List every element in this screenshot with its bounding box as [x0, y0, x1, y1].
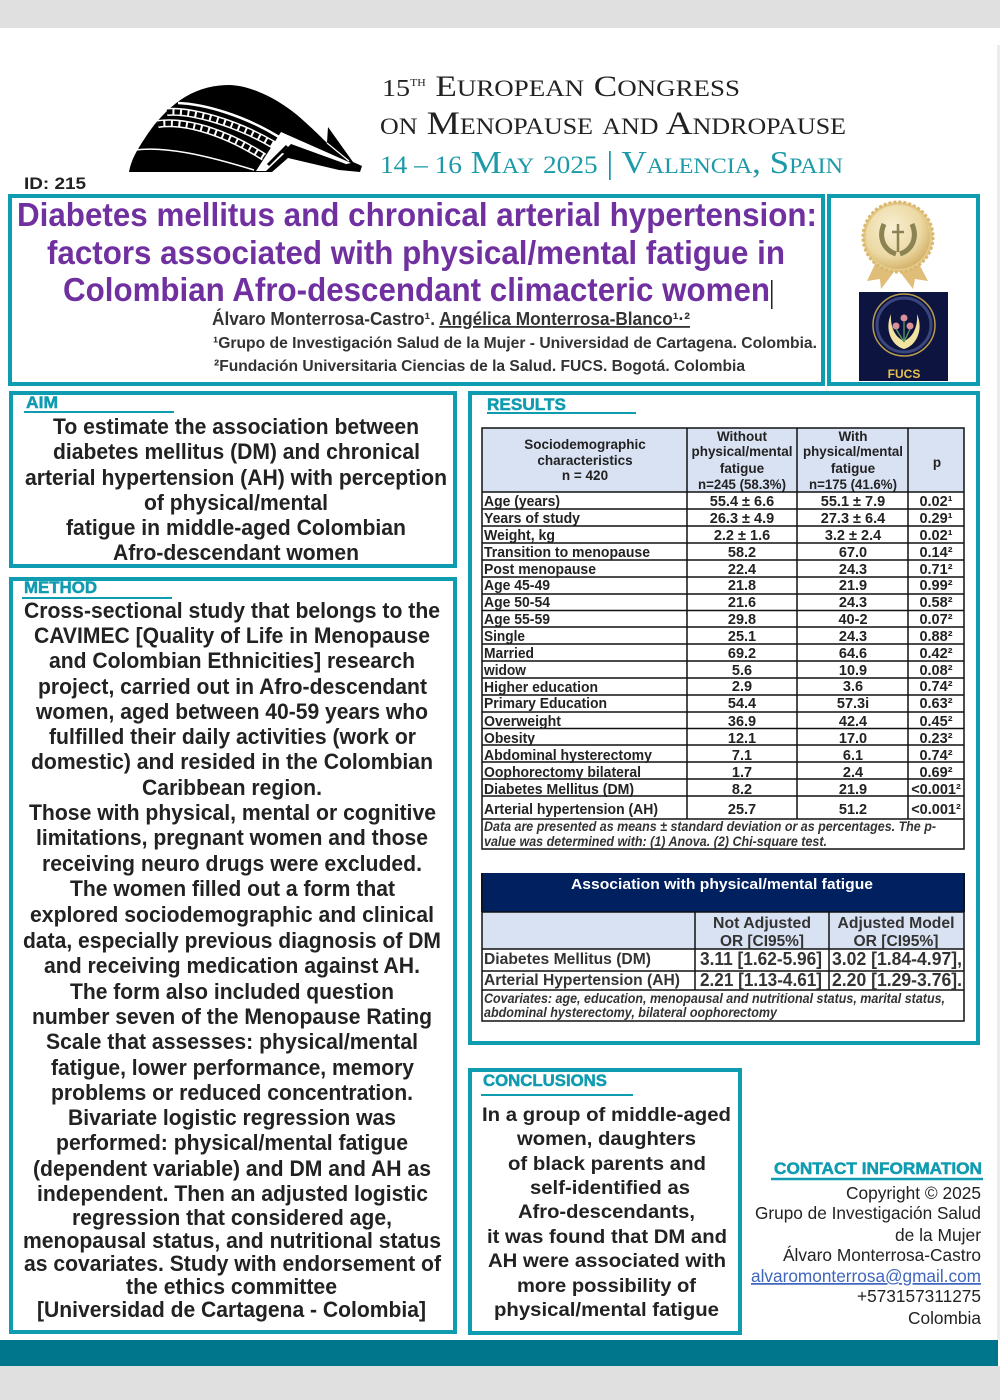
table rows: 21.9 — [839, 782, 867, 798]
table rows: 0.74² — [919, 748, 953, 764]
contact heading: CONTACT INFORMATION — [774, 1159, 982, 1178]
table rows: 21.6 — [728, 595, 756, 611]
congress heading: 14 – 16 May 2025 | Valencia, Spain — [380, 144, 843, 180]
association rows: Diabetes Mellitus (DM) — [484, 951, 651, 968]
panel: conclusions — [470, 1070, 740, 1333]
method text: women, aged between 40-59 years who — [35, 699, 428, 724]
aim heading: AIM — [26, 393, 58, 412]
table rows: 1.7 — [732, 765, 752, 781]
panel: institution logos — [829, 196, 978, 384]
table rows: 6.1 — [843, 748, 863, 764]
table rows: 0.74² — [919, 679, 953, 695]
method text: receiving neuro drugs were excluded. — [42, 851, 422, 876]
table rows: Married — [484, 646, 534, 662]
method text: independent. Then an adjusted logistic — [37, 1181, 428, 1206]
conclusions text: more possibility of — [517, 1276, 697, 1297]
title: factors associated with physical/mental fatigue in — [47, 234, 785, 271]
panel: aim — [11, 393, 455, 566]
association rows: 3.11 [1.62-5.96] — [700, 949, 822, 969]
table rows: 54.4 — [728, 696, 756, 712]
table rows: 0.07² — [919, 612, 953, 628]
method text: as covariates. Study with endorsement of — [24, 1251, 442, 1276]
conclusions text: In a group of middle-aged — [482, 1105, 731, 1126]
table rows: Weight, kg — [484, 528, 555, 544]
association rows — [484, 949, 962, 990]
title: Colombian Afro-descendant climacteric women — [63, 271, 770, 308]
association rows: Arterial Hypertension (AH) — [484, 972, 680, 989]
table rows: 67.0 — [839, 545, 867, 561]
congress heading: European Congress — [435, 68, 722, 104]
contact details: Copyright © 2025 — [846, 1183, 981, 1203]
association column headers: OR [CI95%] — [854, 933, 938, 950]
association column headers: OR [CI95%] — [720, 933, 804, 950]
method text: The form also included question — [70, 979, 394, 1004]
method text: problems or reduced concentration. — [51, 1080, 413, 1105]
contact details — [751, 1183, 981, 1328]
table rows: 58.2 — [728, 545, 756, 561]
congress heading: 15 — [382, 76, 410, 102]
table rows: Abdominal hysterectomy — [484, 748, 652, 764]
table rows: 0.02¹ — [919, 494, 953, 510]
table rows: 24.3 — [839, 562, 867, 578]
table rows: Obesity — [484, 731, 535, 747]
table footnote: Data are presented as means ± standard deviation or as percentages. The p- — [484, 819, 936, 834]
table footnote: value was determined with: (1) Anova. (2) Chi-square test. — [484, 834, 827, 849]
conclusions heading: CONCLUSIONS — [483, 1071, 607, 1090]
authors — [212, 308, 817, 375]
table rows: 64.6 — [839, 646, 867, 662]
contact details: Grupo de Investigación Salud — [755, 1203, 981, 1223]
aim text: fatigue in middle-aged Colombian — [66, 515, 406, 540]
table rows: 0.42² — [919, 646, 953, 662]
conclusions text: it was found that DM and — [487, 1227, 727, 1248]
method text: CAVIMEC [Quality of Life in Menopause — [34, 623, 430, 648]
table rows: 21.8 — [728, 578, 756, 594]
table rows: Age (years) — [484, 494, 560, 510]
panel: results — [470, 393, 978, 1043]
contact details: +573157311275 — [857, 1286, 981, 1306]
table rows: 69.2 — [728, 646, 756, 662]
table header: physical/mental — [692, 444, 792, 459]
conclusions text: self-identified as — [530, 1178, 690, 1199]
authors: ²Fundación Universitaria Ciencias de la Salud. FUCS. Bogotá. Colombia — [214, 358, 745, 375]
contact details: Colombia — [908, 1308, 981, 1328]
table rows: Post menopause — [484, 562, 596, 578]
table rows: 26.3 ± 4.9 — [710, 511, 774, 527]
congress heading — [380, 68, 846, 180]
table header: Sociodemographic — [524, 437, 646, 452]
results heading: RESULTS — [487, 395, 566, 414]
method text: Those with physical, mental or cognitive — [29, 800, 436, 825]
table rows: 36.9 — [728, 714, 756, 730]
bottom grey band — [0, 1366, 1000, 1400]
table rows: Single — [484, 629, 525, 645]
table rows: 2.4 — [843, 765, 863, 781]
poster ID: ID: 215 — [24, 174, 86, 193]
table rows: 0.14² — [919, 545, 953, 561]
table rows: 24.3 — [839, 595, 867, 611]
method text: and Colombian Ethnicities] research — [49, 648, 415, 673]
table rows: 2.9 — [732, 679, 752, 695]
method text: Bivariate logistic regression was — [68, 1105, 396, 1130]
icon: FUCS seal — [859, 292, 948, 381]
icon: FUCS seal: FUCS — [888, 367, 920, 381]
aim text: of physical/mental — [144, 490, 328, 515]
method text: (dependent variable) and DM and AH as — [33, 1156, 431, 1181]
table rows: 51.2 — [839, 802, 867, 818]
congress heading: th — [410, 75, 426, 90]
table header: physical/mental — [803, 444, 903, 459]
table rows: 55.1 ± 7.9 — [821, 494, 885, 510]
table: association with fatigue — [481, 873, 965, 1021]
table header: Without — [717, 429, 768, 444]
table rows: 0.69² — [919, 765, 953, 781]
association footnote: abdominal hysterectomy, bilateral oophorectomy — [484, 1005, 778, 1020]
method text: project, carried out in Afro-descendant — [38, 674, 428, 699]
icon: gold medal — [863, 202, 933, 289]
association column headers: Adjusted Model — [838, 915, 954, 932]
table rows: 0.02¹ — [919, 528, 953, 544]
table rows: 17.0 — [839, 731, 867, 747]
table rows: 0.08² — [919, 663, 953, 679]
conclusions text: Afro-descendants, — [518, 1202, 695, 1223]
association column headers: Not Adjusted — [713, 915, 811, 932]
table rows: 2.2 ± 1.6 — [714, 528, 770, 544]
table header: p — [933, 455, 941, 470]
table rows: 0.45² — [919, 714, 953, 730]
contact information — [751, 1159, 983, 1328]
table rows: widow — [483, 663, 527, 679]
method text: performed: physical/mental fatigue — [56, 1130, 408, 1155]
aim text: arterial hypertension (AH) with perception — [25, 465, 447, 490]
table rows: 21.9 — [839, 578, 867, 594]
congress heading: on Menopause and Andropause — [380, 106, 846, 142]
table header: fatigue — [720, 461, 765, 476]
table rows: 3.6 — [843, 679, 863, 695]
method text: [Universidad de Cartagena - Colombia] — [37, 1297, 426, 1322]
table header: n = 420 — [562, 468, 608, 483]
footer bar — [0, 1340, 998, 1366]
method text: the ethics committee — [126, 1274, 337, 1299]
table rows: 0.58² — [919, 595, 953, 611]
authors: Álvaro Monterrosa-Castro¹. Angélica Monterrosa-Blanco¹·² — [212, 308, 690, 329]
table rows: 24.3 — [839, 629, 867, 645]
table rows: Higher education — [484, 680, 598, 696]
method text: explored sociodemographic and clinical — [30, 902, 434, 927]
method text: limitations, pregnant women and those — [36, 825, 428, 850]
authors: ¹Grupo de Investigación Salud de la Mujer - Universidad de Cartagena. Colombia. — [213, 335, 817, 352]
method text: The women filled out a form that — [70, 876, 396, 901]
conclusions text: AH were associated with — [488, 1251, 726, 1272]
association rows: 3.02 [1.84-4.97], — [832, 949, 962, 969]
table header: fatigue — [831, 461, 876, 476]
table header — [482, 428, 964, 492]
conclusions text: women, daughters — [516, 1129, 696, 1150]
table rows: 5.6 — [732, 663, 752, 679]
table rows: Years of study — [484, 511, 580, 527]
table footnote — [484, 819, 936, 849]
table rows: 3.2 ± 2.4 — [825, 528, 881, 544]
table rows — [483, 494, 961, 818]
method text: domestic) and resided in the Colombian — [31, 749, 433, 774]
method text — [23, 598, 442, 1322]
method text: number seven of the Menopause Rating — [32, 1004, 432, 1029]
table rows: 40-2 — [838, 612, 868, 628]
association heading: Association with physical/mental fatigue — [571, 876, 873, 893]
table rows: Transition to menopause — [484, 545, 650, 561]
table rows: 22.4 — [728, 562, 756, 578]
title — [17, 196, 817, 308]
method text: regression that considered age, — [72, 1205, 392, 1230]
table rows: 0.29¹ — [919, 511, 953, 527]
table header: characteristics — [537, 453, 633, 468]
table rows: 42.4 — [839, 714, 867, 730]
panel: title — [10, 196, 823, 384]
contact details: de la Mujer — [895, 1225, 981, 1245]
method text: Scale that assesses: physical/mental — [46, 1029, 418, 1054]
panel: method — [11, 578, 455, 1332]
title: Diabetes mellitus and chronical arterial hypertension: — [17, 196, 817, 233]
table rows: 27.3 ± 6.4 — [821, 511, 885, 527]
table rows: <0.001² — [911, 782, 961, 798]
contact details: alvaromonterrosa@gmail.com — [751, 1266, 981, 1286]
method text: data, especially previous diagnosis of DM — [23, 928, 441, 953]
table rows: 10.9 — [839, 663, 867, 679]
association rows: 2.20 [1.29-3.76]. — [832, 970, 962, 990]
conclusions text — [482, 1105, 731, 1321]
association column headers — [713, 915, 954, 950]
association footnote: Covariates: age, education, menopausal and nutritional status, marital status, — [484, 991, 945, 1006]
method text: fatigue, lower performance, memory — [51, 1055, 415, 1080]
icon: congress building logo — [129, 85, 362, 172]
method text: fulfilled their daily activities (work or — [49, 724, 416, 749]
association rows: 2.21 [1.13-4.61] — [700, 970, 822, 990]
method text: menopausal status, and nutritional status — [23, 1228, 441, 1253]
table rows: Age 50-54 — [484, 595, 550, 611]
table rows: 29.8 — [728, 612, 756, 628]
table rows: Diabetes Mellitus (DM) — [484, 782, 634, 798]
table rows: 12.1 — [728, 731, 756, 747]
aim text: To estimate the association between — [53, 414, 419, 439]
aim text: Afro-descendant women — [113, 540, 359, 565]
table rows: Primary Education — [484, 696, 607, 712]
top grey band — [0, 0, 1000, 28]
conclusions text: of black parents and — [508, 1154, 706, 1175]
table: sociodemographic characteristics — [482, 428, 964, 849]
table rows: Arterial hypertension (AH) — [484, 802, 658, 818]
conclusions text: physical/mental fatigue — [494, 1300, 719, 1321]
table header: n=175 (41.6%) — [809, 477, 897, 492]
table rows: 25.1 — [728, 629, 756, 645]
table rows: 0.71² — [919, 562, 953, 578]
table rows: Overweight — [484, 714, 561, 730]
method text: and receiving medication against AH. — [44, 953, 420, 978]
association footnote — [484, 991, 945, 1020]
table rows: 25.7 — [728, 802, 756, 818]
table rows: Age 45-49 — [484, 578, 550, 594]
table rows: Age 55-59 — [484, 612, 550, 628]
table rows: 55.4 ± 6.6 — [710, 494, 774, 510]
method text: Caribbean region. — [142, 775, 322, 800]
table rows: 57.3i — [837, 696, 869, 712]
table rows: 0.63² — [919, 696, 953, 712]
table rows: 8.2 — [732, 782, 752, 798]
table rows: 0.88² — [919, 629, 953, 645]
table rows: 0.23² — [919, 731, 953, 747]
aim text — [25, 414, 447, 565]
table header: n=245 (58.3%) — [698, 477, 786, 492]
aim text: diabetes mellitus (DM) and chronical — [53, 439, 420, 464]
method text: Cross-sectional study that belongs to the — [24, 598, 440, 623]
contact details: Álvaro Monterrosa-Castro — [783, 1245, 981, 1265]
table header: With — [838, 429, 868, 444]
method heading: METHOD — [24, 578, 97, 597]
table rows: Oophorectomy bilateral — [484, 765, 641, 781]
table rows: 0.99² — [919, 578, 953, 594]
table rows: 7.1 — [732, 748, 752, 764]
table rows: <0.001² — [911, 802, 961, 818]
